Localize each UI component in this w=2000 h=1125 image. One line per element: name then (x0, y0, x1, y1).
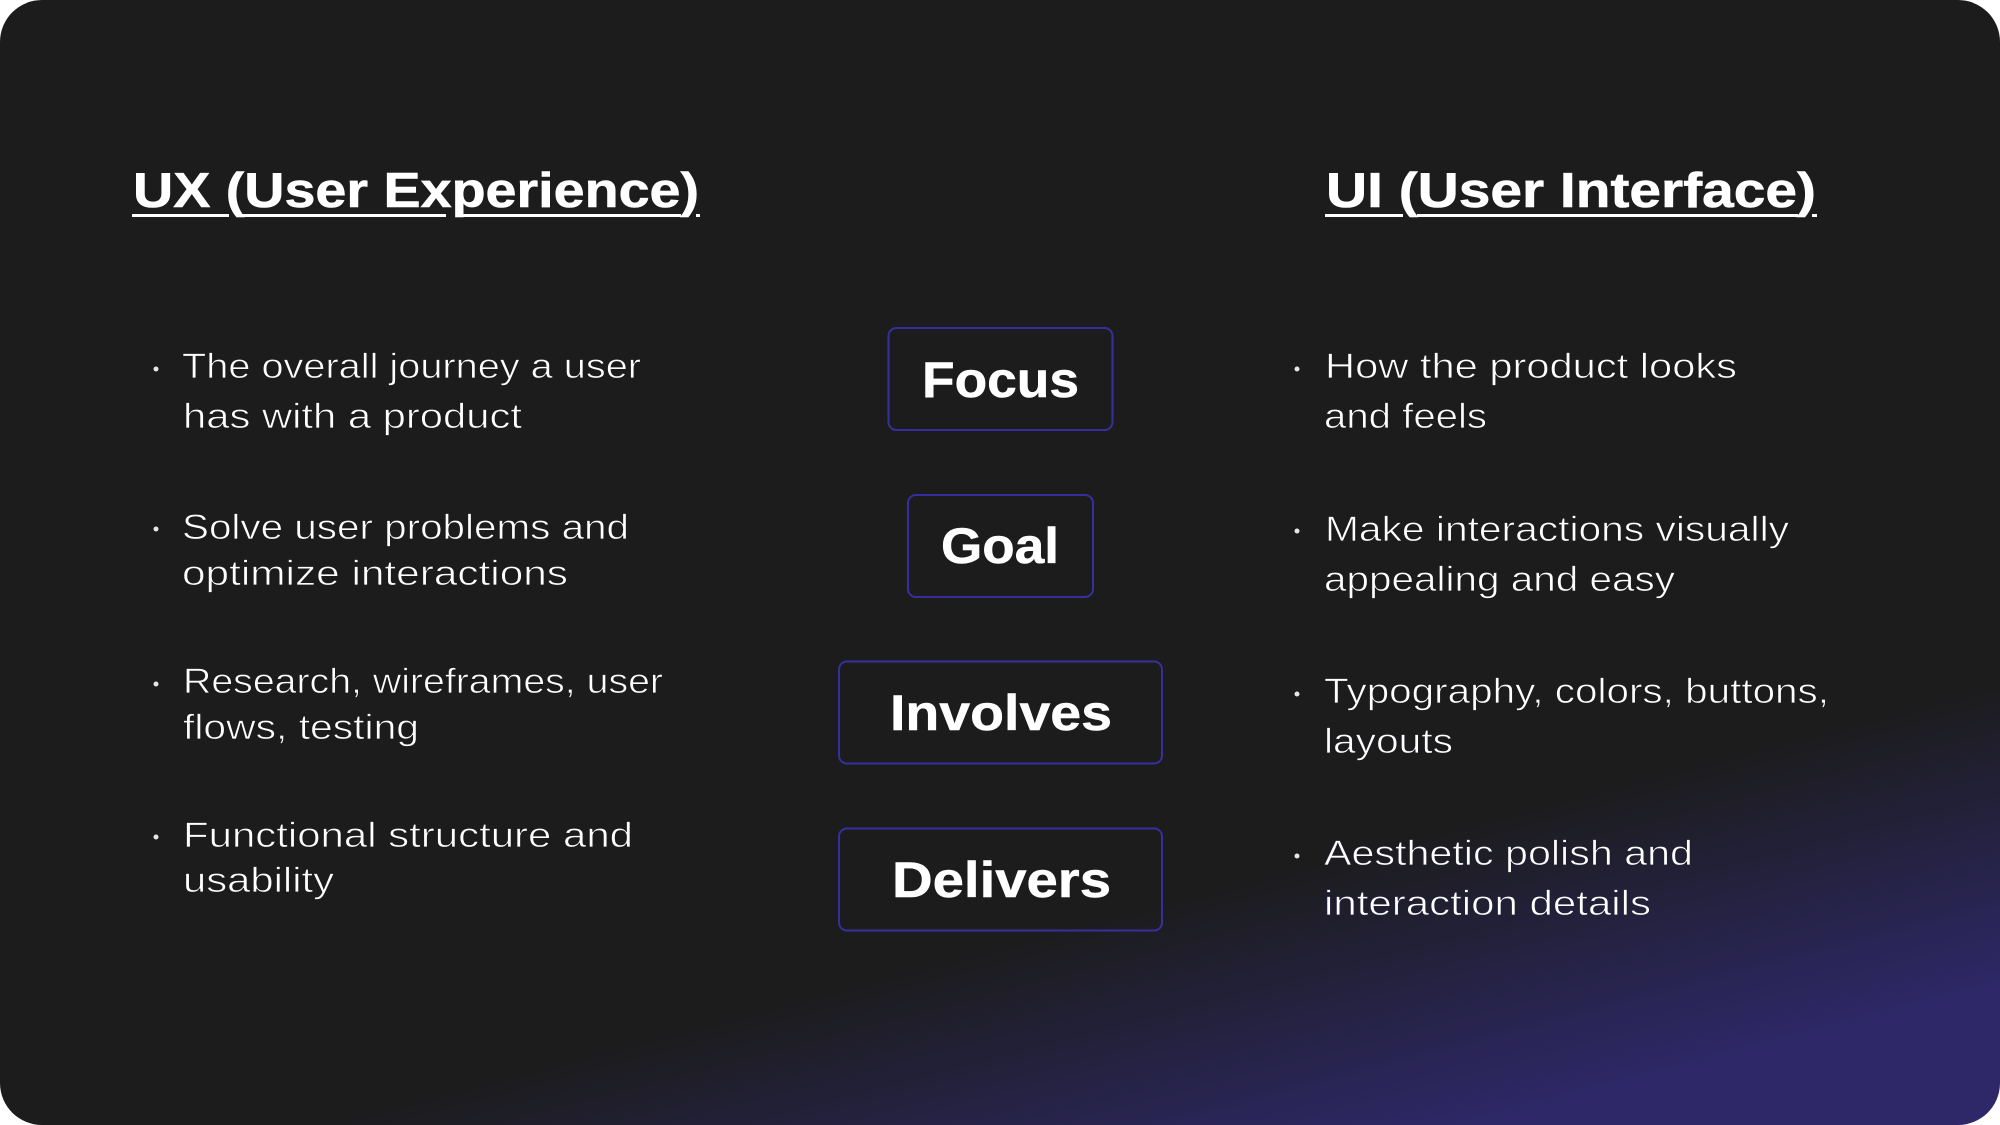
UI point: typography (1294, 672, 1829, 761)
UX point: structure (154, 816, 633, 900)
UI point: interactions: appealing and easy (1324, 560, 1676, 599)
UX point: journey: The overall journey a user (182, 347, 641, 386)
UX point: journey (154, 347, 641, 436)
UI point: interactions: Make interactions visually (1325, 510, 1790, 549)
heading: UI (User Interface): UI (User Interface) (1326, 164, 1816, 218)
UI point: interactions (1294, 510, 1790, 599)
UI point: typography: layouts (1324, 722, 1453, 761)
center labels (839, 328, 1162, 930)
UX point: problems (154, 508, 629, 593)
UX list (154, 347, 663, 900)
label: Focus (888, 328, 1112, 430)
UI point: typography: Typography, colors, buttons, (1324, 672, 1829, 711)
UI point: polish: Aesthetic polish and (1324, 834, 1693, 873)
UX point: structure: Functional structure and (183, 816, 633, 855)
UI point: polish: interaction details (1324, 884, 1651, 923)
heading: UX (User Experience): UX (User Experience) (133, 164, 699, 218)
UI list (1294, 347, 1829, 923)
label: Goal (908, 495, 1093, 597)
label: Delivers (839, 828, 1162, 930)
label: Focus: Focus (922, 352, 1079, 408)
label: Involves: Involves (890, 685, 1112, 741)
label: Goal: Goal (941, 518, 1059, 574)
UX point: problems: optimize interactions (182, 554, 568, 593)
label: Delivers: Delivers (892, 852, 1111, 908)
UX point: structure: usability (183, 861, 335, 900)
UI point: polish (1294, 834, 1693, 923)
UX point: problems: Solve user problems and (182, 508, 629, 547)
UX point: journey: has with a product (183, 397, 522, 436)
UX point: research: Research, wireframes, user (183, 662, 663, 701)
UX point: research: flows, testing (183, 708, 419, 747)
label: Involves (839, 662, 1162, 764)
UI point: looks: and feels (1324, 397, 1487, 436)
UX point: research (154, 662, 663, 747)
UI point: looks: How the product looks (1325, 347, 1737, 386)
UI point: looks (1294, 347, 1737, 436)
